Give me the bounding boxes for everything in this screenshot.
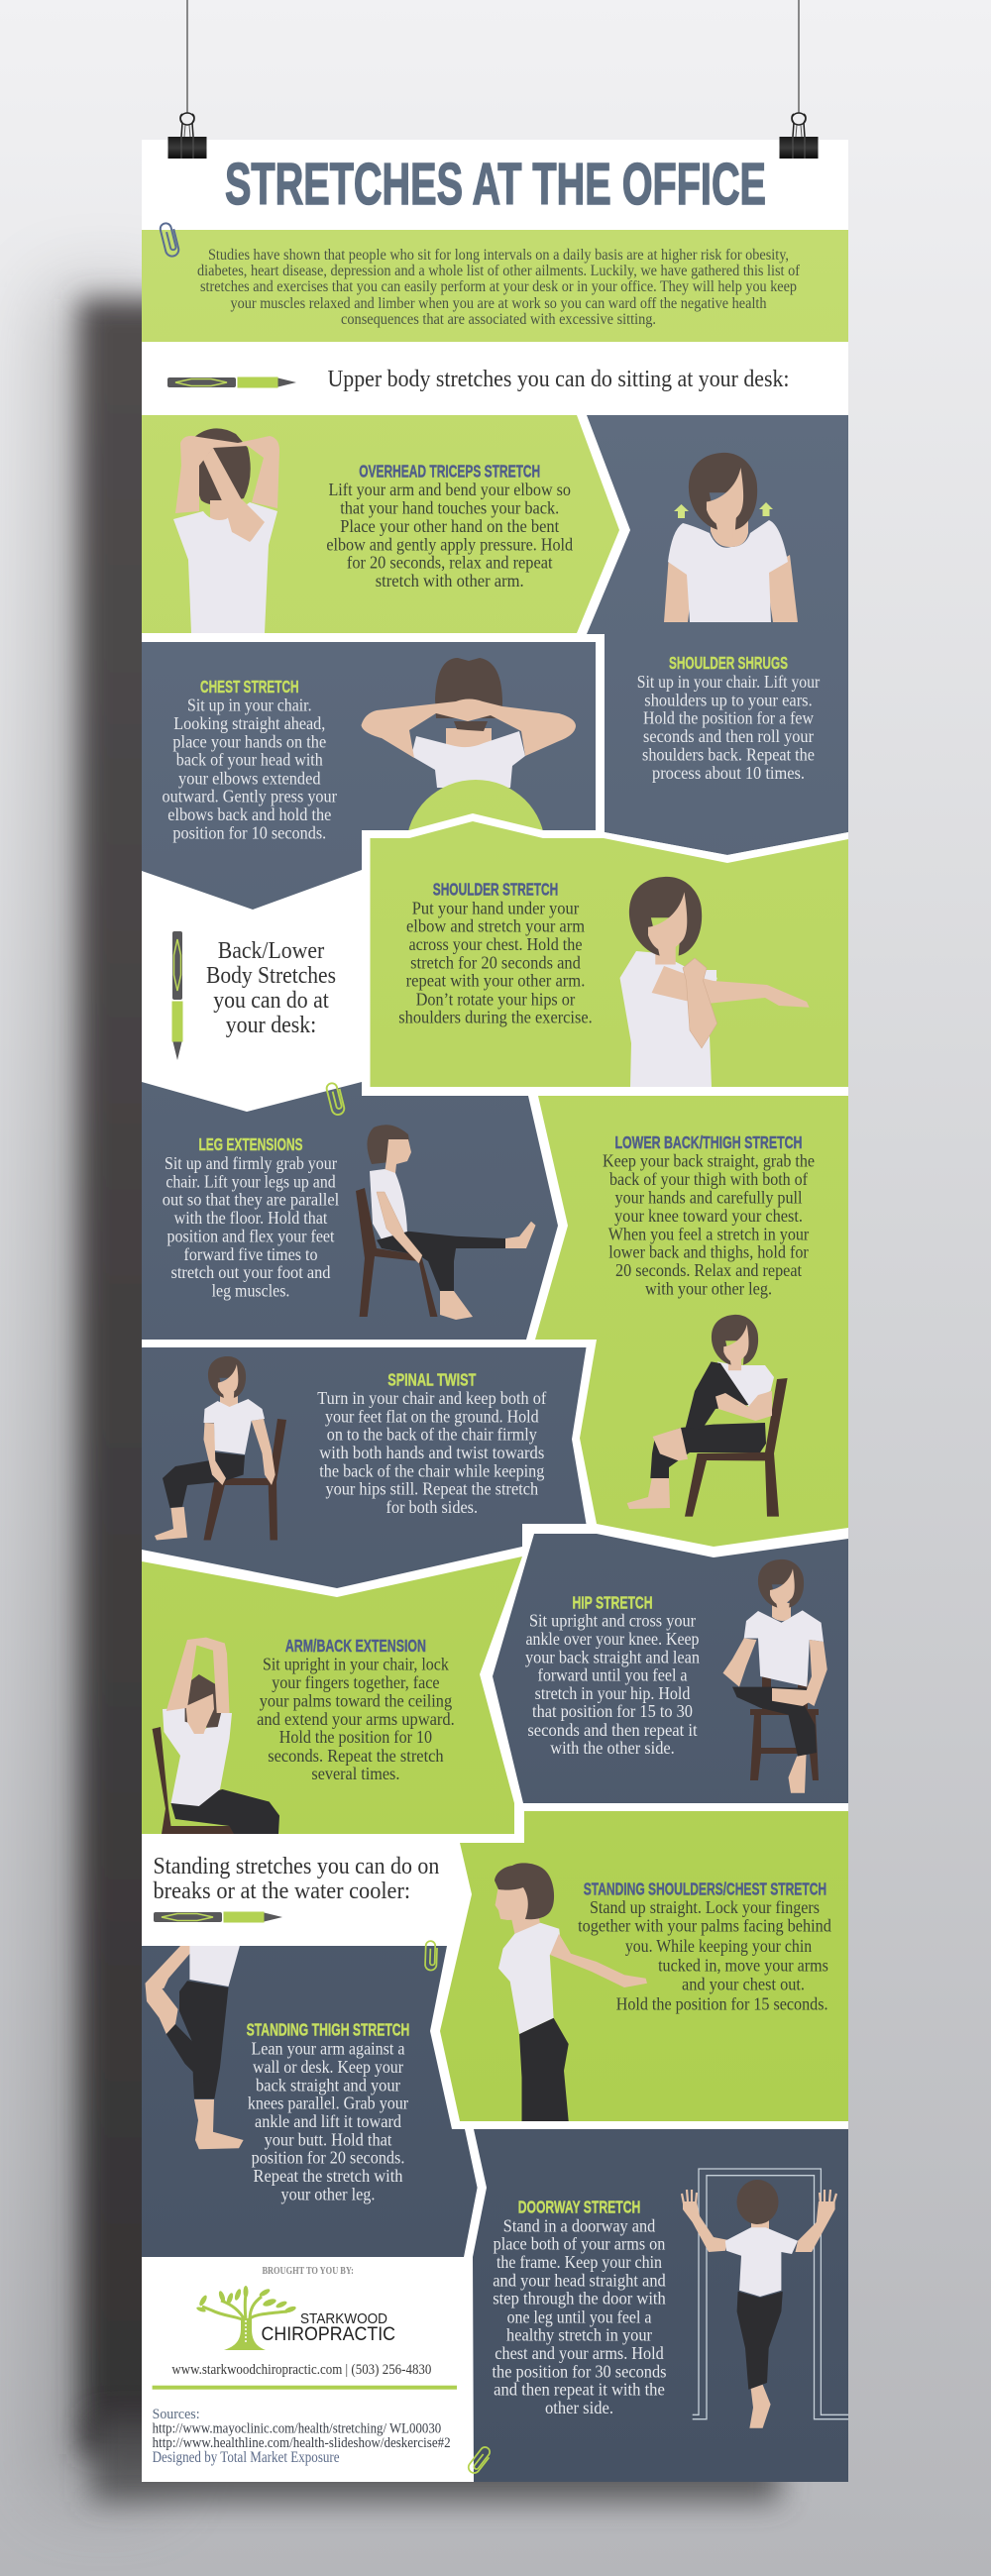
body text: the frame. Keep your chin [496, 2252, 662, 2272]
body text: 20 seconds. Relax and repeat [615, 1260, 802, 1280]
figure: standing shoulder stretch [495, 1863, 647, 2121]
body text: Lift your arm and bend your elbow so [328, 480, 571, 499]
body text: and then repeat it with the [494, 2380, 665, 2400]
body text: wall or desk. Keep your [253, 2057, 403, 2077]
panel: standing shoulders and chest stretch [440, 1811, 848, 2121]
body text: and your head straight and [493, 2270, 666, 2290]
body text: that your hand touches your back. [340, 497, 559, 517]
body text: Don’t rotate your hips or [416, 989, 575, 1009]
body text: shoulders up to your ears. [644, 690, 813, 709]
panel: arm and back extension [142, 1556, 522, 1834]
panel: spiral twist [142, 1347, 587, 1588]
body text [525, 1611, 700, 1758]
panel: doorway stretch [473, 2129, 848, 2482]
section heading: standing stretches: breaks or at the water cooler: [153, 1878, 410, 1904]
body text [317, 1388, 546, 1517]
intro text: diabetes, heart disease, depression and a whole list of other ailments. Luckily, we have gathered this list of [197, 263, 801, 279]
body text: your elbows extended [178, 768, 321, 788]
body text: step through the door with [493, 2289, 666, 2308]
body text: one leg until you feel a [507, 2307, 652, 2326]
body text: your palms toward the ceiling [260, 1691, 452, 1711]
body text: out so that they are parallel [163, 1190, 339, 1210]
body text [578, 1897, 831, 2014]
body text: Lean your arm against a [252, 2039, 405, 2059]
logo: Starkwood Chiropractic: CHIROPRACTIC [262, 2324, 395, 2345]
body text: your feet flat on the ground. Hold [325, 1406, 539, 1426]
body text: Place your other hand on the bent [340, 516, 559, 536]
section heading: standing stretches [153, 1854, 439, 1922]
section heading: upper body [167, 367, 789, 392]
figure: standing thigh stretch [145, 1946, 244, 2149]
body text: you. While keeping your chin [625, 1936, 812, 1956]
hanging strings [187, 0, 799, 113]
figure: overhead triceps [173, 428, 279, 633]
body text [637, 672, 820, 783]
section heading: upper body: Upper body stretches you can do sitting at your desk: [327, 367, 789, 392]
section heading: back and lower body: you can do at [213, 988, 329, 1014]
sources: Sources: [153, 2407, 200, 2422]
body text: back of your thigh with both of [609, 1169, 808, 1189]
body text: back straight and your [256, 2075, 400, 2094]
body text: other side. [545, 2398, 613, 2417]
body text: knees parallel. Grab your [248, 2093, 408, 2113]
body text: place your hands on the [172, 731, 326, 751]
body text [257, 1655, 455, 1783]
figure: hip stretch [723, 1559, 827, 1793]
icon: pen [154, 1912, 282, 1922]
panel: chest stretch [142, 642, 596, 914]
body text [492, 2215, 667, 2417]
body text: lower back and thighs, hold for [608, 1242, 809, 1262]
heading: HIP STRETCH [573, 1592, 652, 1612]
body text: seconds and then repeat it [527, 1720, 698, 1740]
sources: Designed by Total Market Exposure [153, 2449, 340, 2466]
body text [398, 898, 593, 1027]
panel: footer credits [153, 2265, 457, 2466]
heading: SPINAL TWIST [387, 1370, 477, 1390]
body text: When you feel a stretch in your [608, 1224, 809, 1243]
body text: your other leg. [281, 2184, 375, 2203]
logo: Starkwood Chiropractic [196, 2286, 395, 2350]
body text: stretch with other arm. [376, 571, 524, 590]
section heading: back and lower body [172, 931, 336, 1060]
body text: Stand in a doorway and [503, 2215, 655, 2235]
body text: Looking straight ahead, [173, 713, 325, 733]
body text: with both hands and twist towards [319, 1443, 544, 1462]
body text: Sit upright in your chair, lock [263, 1655, 449, 1674]
body text: place both of your arms on [494, 2234, 666, 2254]
panel: leg extensions [142, 1082, 558, 1340]
body text: leg muscles. [212, 1281, 289, 1301]
body text: process about 10 times. [652, 763, 805, 783]
body text: Sit up and firmly grab your [165, 1153, 337, 1173]
body text: shoulders during the exercise. [398, 1008, 593, 1027]
heading: STANDING THIGH STRETCH [247, 2019, 409, 2039]
heading: OVERHEAD TRICEPS STRETCH [359, 462, 540, 482]
body text: Sit up in your chair. [187, 696, 312, 715]
figure: lower back stretch [627, 1315, 788, 1517]
icon: blue paperclip [160, 222, 180, 258]
intro text: stretches and exercises that you can easily perform at your desk or in your office. They will help you keep [200, 278, 797, 295]
body text: across your chest. Hold the [408, 934, 583, 954]
intro text: your muscles relaxed and limber when you are at work so you can ward off the negative health [230, 295, 767, 312]
body text: stretch out your foot and [170, 1262, 331, 1282]
body text: stretch for 20 seconds and [410, 952, 581, 972]
heading: DOORWAY STRETCH [518, 2198, 640, 2217]
body text: shoulders back. Repeat the [642, 744, 815, 764]
body text: seconds. Repeat the stretch [268, 1746, 444, 1766]
body text: outward. Gently press your [163, 787, 337, 806]
heading: SHOULDER STRETCH [433, 879, 558, 899]
white cutout around shoulder stretch panel [362, 813, 848, 1096]
body text: stretch in your hip. Hold [535, 1683, 691, 1703]
panel: standing thigh stretch [142, 1946, 478, 2257]
body text: that position for 15 to 30 [532, 1701, 693, 1721]
body text: tucked in, move your arms [658, 1956, 828, 1976]
icon: tree [196, 2286, 296, 2350]
body text: the back of the chair while keeping [319, 1460, 545, 1480]
body text: repeat with your other arm. [406, 971, 585, 991]
heading: ARM/BACK EXTENSION [285, 1636, 426, 1656]
body text: forward five times to [184, 1244, 318, 1264]
body text: for 20 seconds, relax and repeat [347, 553, 553, 573]
heading: CHEST STRETCH [200, 677, 299, 697]
heading: LEG EXTENSIONS [198, 1134, 303, 1154]
body text: elbow and stretch your arm [406, 916, 585, 936]
body text: healthy stretch in your [506, 2324, 652, 2344]
body text: chest and your arms. Hold [495, 2343, 664, 2363]
body text [163, 1153, 339, 1301]
intro text [197, 247, 801, 328]
body text: ankle and lift it toward [255, 2111, 401, 2131]
heading: STANDING SHOULDERS/CHEST STRETCH [584, 1878, 826, 1898]
figure: chest stretch [361, 658, 576, 914]
body text: and extend your arms upward. [257, 1709, 455, 1729]
body text: elbow and gently apply pressure. Hold [326, 534, 573, 554]
body text [603, 1151, 815, 1298]
heading: LOWER BACK/THIGH STRETCH [614, 1132, 803, 1152]
divider bar [153, 2386, 457, 2390]
body text [326, 480, 573, 590]
heading: SHOULDER SHRUGS [669, 653, 788, 673]
figure: doorway stretch [682, 2169, 848, 2428]
body text: and your chest out. [682, 1974, 805, 1993]
body text: several times. [311, 1764, 399, 1783]
panel: overhead triceps stretch [142, 415, 619, 633]
intro text: consequences that are associated with excessive sitting. [341, 311, 656, 328]
body text: Keep your back straight, grab the [603, 1151, 815, 1171]
body text: your fingers together, face [272, 1672, 440, 1692]
section heading: back and lower body: Body Stretches [206, 963, 336, 989]
body text: position for 20 seconds. [252, 2148, 404, 2168]
contact line: www.starkwoodchiropractic.com | (503) 256-4830 [171, 2362, 431, 2378]
body text: the position for 30 seconds [492, 2361, 667, 2381]
icon: pen [167, 376, 296, 388]
body text: Sit upright and cross your [529, 1611, 696, 1631]
icon: green paperclip [425, 1941, 437, 1971]
body text: forward until you feel a [537, 1665, 688, 1685]
poster shadow [45, 287, 780, 2502]
body text: back of your head with [176, 750, 323, 770]
icon: green paperclip on footer [466, 2445, 494, 2475]
poster sheet [142, 140, 848, 2482]
sources [153, 2407, 451, 2466]
body text: Hold the position for 10 [279, 1727, 432, 1747]
body text: position for 10 seconds. [172, 822, 326, 842]
panel: shoulder shrugs [587, 415, 848, 855]
body text: Stand up straight. Lock your fingers [590, 1897, 820, 1917]
icon: vertical pen [172, 931, 182, 1060]
body text: Repeat the stretch with [254, 2166, 403, 2186]
body text: for both sides. [386, 1497, 478, 1517]
brought to you by: BROUGHT TO YOU BY: [262, 2265, 354, 2277]
body text: your butt. Hold that [265, 2129, 392, 2149]
body text: ankle over your knee. Keep [525, 1629, 700, 1649]
body text: Turn in your chair and keep both of [317, 1388, 546, 1408]
body text: your knee toward your chest. [614, 1206, 803, 1226]
section heading: back and lower body: Back/Lower [218, 938, 324, 964]
icon: green paperclip [326, 1082, 346, 1116]
sources: http://www.mayoclinic.com/health/stretching/ WL00030 [153, 2421, 441, 2437]
sources: http://www.healthline.com/health-slideshow/deskercise#2 [153, 2435, 451, 2451]
door frame [693, 2169, 848, 2419]
body text: your hands and carefully pull [614, 1187, 803, 1207]
body text: Put your hand under your [412, 898, 579, 917]
panel: lower back and thigh stretch [535, 1096, 848, 1547]
body text: seconds and then roll your [643, 726, 814, 746]
section heading: back and lower body: your desk: [226, 1013, 316, 1038]
body text: elbows back and hold the [167, 805, 332, 824]
section heading: standing stretches: Standing stretches you can do on [153, 1854, 439, 1879]
body text: Hold the position for 15 seconds. [616, 1994, 827, 2014]
figure: spiral twist [155, 1356, 286, 1540]
figure: shoulder stretch [620, 877, 810, 1087]
body text: with the floor. Hold that [174, 1208, 328, 1228]
figure: leg extension [356, 1125, 535, 1320]
panel: intro [142, 230, 848, 342]
panel: shoulder stretch [371, 821, 848, 1087]
body text: on to the back of the chair firmly [327, 1425, 537, 1445]
logo: Starkwood Chiropractic: STARKWOOD [300, 2310, 387, 2327]
icon: up arrows [674, 502, 773, 518]
body text: Hold the position for a few [643, 708, 814, 728]
body text: Sit up in your chair. Lift your [637, 672, 820, 692]
body text [163, 696, 337, 842]
body text: with your other leg. [645, 1278, 772, 1298]
body text: together with your palms facing behind [578, 1915, 831, 1935]
body text: your back straight and lean [525, 1647, 700, 1666]
figure: shoulder shrug [664, 453, 798, 622]
body text: chair. Lift your legs up and [165, 1171, 336, 1191]
panel: hip stretch [493, 1534, 848, 1803]
figure: arm extension [153, 1638, 279, 1834]
body text: your hips still. Repeat the stretch [325, 1479, 538, 1499]
binder clips [168, 113, 819, 159]
intro text: Studies have shown that people who sit for long intervals on a daily basis are at higher risk for obesity, [208, 247, 789, 264]
exercise ball [406, 780, 545, 914]
body text: with the other side. [550, 1738, 675, 1758]
body text: position and flex your feet [166, 1226, 335, 1245]
body text [248, 2039, 408, 2203]
